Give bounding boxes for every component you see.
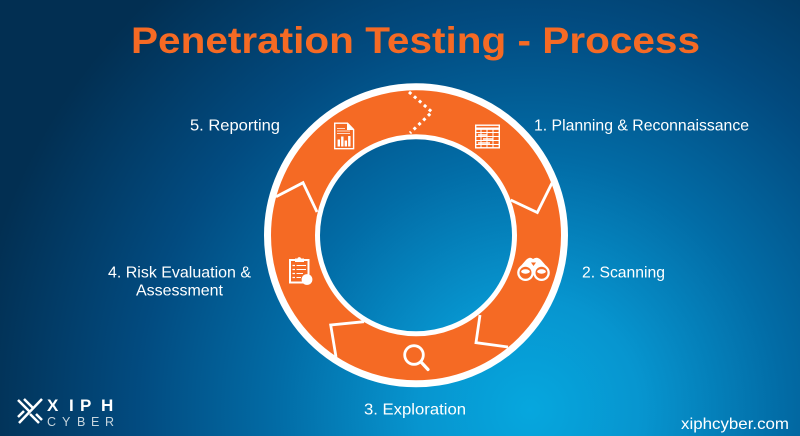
label: 2. Scanning: 2. Scanning [582, 264, 665, 282]
logo wordmark: X [47, 396, 59, 415]
logo mark [18, 399, 42, 423]
logo wordmark: I [69, 396, 74, 415]
divider: start and end of cycle (dotted) [409, 92, 432, 133]
logo wordmark: H [101, 396, 113, 415]
logo: Xiph Cyber [18, 396, 114, 429]
title: Penetration Testing - Process [131, 20, 700, 61]
icon: clipboard checklist [290, 257, 312, 285]
divider: stage 4 to stage 5 [276, 183, 317, 212]
label: 1. Planning & Reconnaissance: 1. Planning & Reconnaissance [534, 118, 749, 134]
divider: stage 3 to stage 4 [331, 322, 364, 357]
label: 4. Risk Evaluation & Assessment: Assessment [136, 282, 224, 300]
icon: planning table [476, 125, 499, 148]
logo subtitle: R [105, 415, 114, 429]
logo subtitle: Y [62, 415, 71, 429]
logo subtitle: E [91, 415, 99, 429]
label: 3. Exploration: 3. Exploration [364, 402, 466, 418]
icon: magnifying glass [405, 346, 428, 370]
label: 4. Risk Evaluation & Assessment [108, 264, 251, 300]
process ring [268, 87, 564, 384]
label: 4. Risk Evaluation & Assessment: 4. Risk Evaluation & [108, 264, 251, 282]
ring: outer white border [268, 87, 564, 384]
icon: report document [335, 123, 354, 149]
ring: orange band [293, 112, 539, 358]
logo subtitle: B [77, 415, 85, 429]
icon: binoculars [517, 258, 550, 281]
logo wordmark: P [80, 396, 91, 415]
ring: inner white border [318, 137, 514, 334]
logo subtitle: C [47, 415, 56, 429]
logo wordmark [47, 396, 113, 415]
label: 5. Reporting: 5. Reporting [190, 118, 280, 134]
website address: xiphcyber.com [681, 416, 789, 433]
logo subtitle [47, 415, 114, 429]
divider: stage 2 to stage 3 [476, 315, 508, 347]
divider: stage 1 to stage 2 [511, 183, 552, 212]
